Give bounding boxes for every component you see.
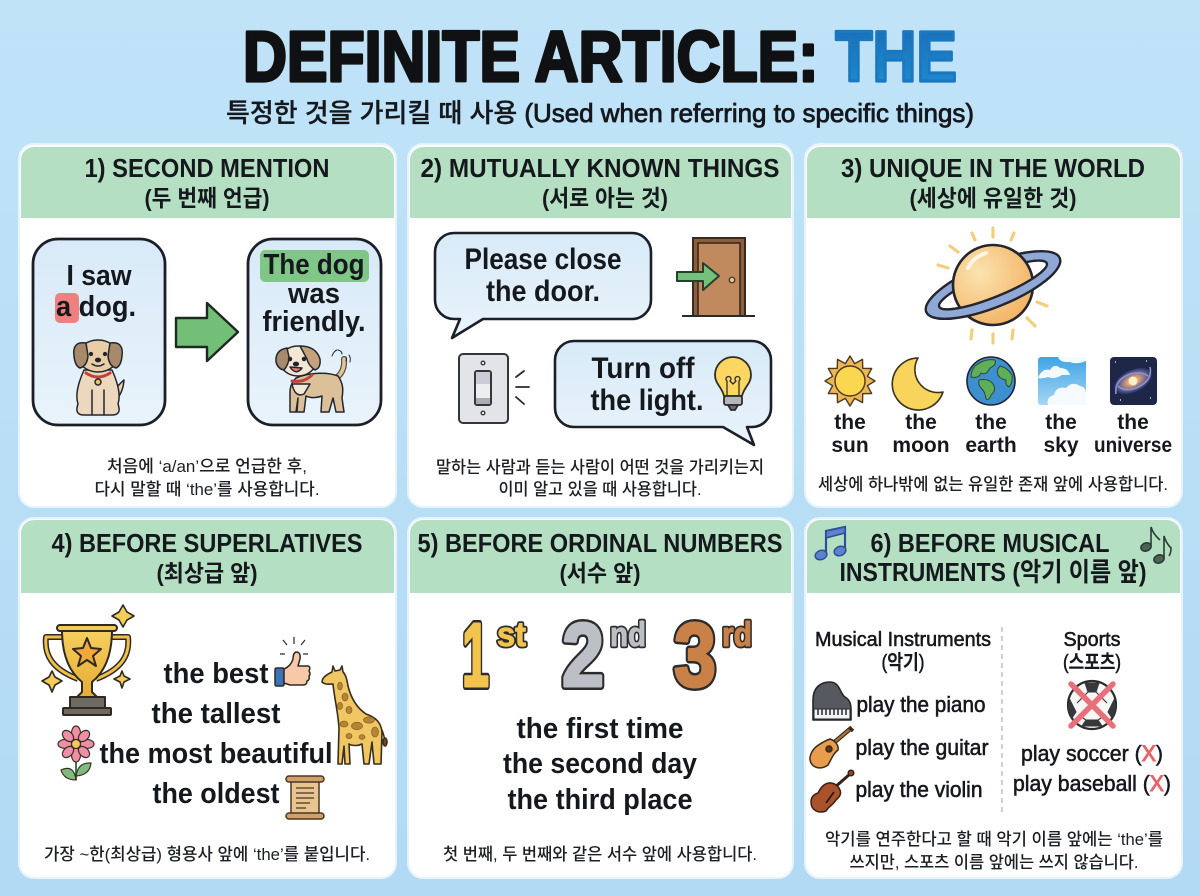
icon: galaxy — [1110, 357, 1157, 405]
panel heading: before musical instruments: INSTRUMENTS (악기 이름 앞) — [840, 557, 1146, 587]
superlative phrases: the best — [164, 658, 269, 690]
ordinal: 2nd: 2 — [562, 606, 604, 706]
label: the earth — [965, 411, 1017, 457]
ordinal phrases: the second day — [503, 748, 697, 780]
caption: before superlatives: 가장 ~한(최상급) 형용사 앞에 ‘the’를 붙입니다. — [44, 845, 370, 864]
icon: guitar — [810, 727, 853, 768]
ordinal phrases — [503, 713, 697, 816]
arrow: second mention — [176, 303, 238, 361]
card: the dog was friendly — [248, 239, 381, 425]
title: DEFINITE ARTICLE: THE — [243, 18, 957, 97]
ordinal: 3rd — [674, 606, 752, 706]
icon: flower — [58, 726, 94, 780]
icon: light bulb — [715, 357, 751, 410]
icon: eighth notes — [1140, 527, 1171, 565]
column: sports — [1013, 629, 1171, 796]
label: the sun: sun — [831, 434, 869, 457]
caption: before musical instruments — [825, 830, 1163, 872]
ordinal: 1st: st — [497, 616, 526, 654]
icon: standing dog — [276, 346, 350, 412]
caption: second mention: 다시 말할 때 ‘the’를 사용합니다. — [94, 480, 320, 499]
ordinal phrases: the first time — [516, 713, 684, 745]
icon: light switch — [459, 354, 529, 423]
panel heading: before superlatives: (최상급 앞) — [156, 560, 258, 586]
icon: moon — [892, 358, 943, 410]
label: the moon: moon — [892, 434, 950, 457]
ordinal: 2nd: 2 — [562, 606, 604, 706]
caption: mutually known things: 이미 알고 있을 때 사용합니다. — [498, 480, 702, 499]
label: the sky — [1043, 411, 1079, 457]
panel heading: unique in the world — [807, 147, 1180, 218]
card: the dog was friendly: The dog — [264, 249, 364, 281]
panel: before musical instruments — [805, 518, 1182, 878]
panel heading: before musical instruments — [807, 520, 1180, 593]
column: sports: (스포츠) — [1063, 652, 1121, 674]
speech bubble: please close the door: Please close — [464, 243, 622, 276]
card: the dog was friendly: was — [287, 278, 340, 310]
phrase: play the violin: play the violin — [856, 777, 982, 802]
label: the earth: the — [975, 411, 1007, 434]
panel: mutually known things — [408, 144, 793, 507]
caption: mutually known things — [436, 458, 764, 499]
panel: before ordinal numbers — [408, 518, 793, 878]
icon: scroll — [286, 776, 324, 819]
column: musical instruments — [810, 629, 991, 812]
ordinal: 2nd — [562, 606, 646, 706]
ordinal: 1st: st — [497, 616, 526, 654]
caption: before musical instruments: 쓰지만, 스포츠 이름 앞에는 쓰지 않습니다. — [850, 853, 1138, 872]
card: the dog was friendly: friendly. — [262, 306, 366, 338]
panel heading: mutually known things — [410, 147, 791, 218]
label: the sky: the — [1045, 411, 1077, 434]
speech bubble: please close the door: the door. — [486, 275, 600, 308]
ordinal: 2nd: nd — [610, 616, 646, 654]
speech bubble: please close the door — [435, 233, 651, 338]
superlative phrases: the tallest — [152, 698, 281, 730]
ordinal: 3rd: 3 — [674, 606, 716, 706]
column: musical instruments: (악기) — [882, 651, 924, 674]
icon: trophy with sparkles — [42, 605, 134, 715]
panel heading: before ordinal numbers — [410, 520, 791, 593]
panel heading: unique in the world: 3) UNIQUE IN THE WORLD — [841, 153, 1145, 183]
label: the sky: sky — [1043, 434, 1079, 457]
icon: beamed notes — [814, 527, 847, 561]
ordinal: 2nd: nd — [610, 616, 646, 654]
subtitle: 특정한 것을 가리킬 때 사용 (Used when referring to specific things) — [226, 98, 974, 128]
panel heading: unique in the world: (세상에 유일한 것) — [910, 185, 1076, 211]
speech bubble: turn off the light: Turn off — [592, 352, 695, 385]
label: the sun: the — [834, 411, 866, 434]
column: sports: Sports — [1064, 629, 1120, 651]
ordinal: 1st: 1 — [462, 606, 489, 706]
icon: sky — [1038, 357, 1086, 405]
panel: second mention — [19, 144, 396, 507]
caption: second mention: 처음에 ‘a/an’으로 언급한 후, — [107, 457, 307, 476]
phrase: play baseball (X): play baseball (X) — [1013, 771, 1171, 796]
caption: mutually known things: 말하는 사람과 듣는 사람이 어떤 것을 가리키는지 — [436, 458, 764, 477]
panel heading: before superlatives: 4) BEFORE SUPERLATIVES — [52, 528, 362, 558]
icon: sun — [825, 356, 875, 406]
caption: second mention — [94, 457, 320, 499]
speech bubble: turn off the light: the light. — [590, 384, 704, 417]
icon: thumbs up — [275, 637, 310, 686]
phrase: play the guitar: play the guitar — [856, 735, 988, 760]
panel heading: second mention: 1) SECOND MENTION — [84, 153, 330, 183]
caption: unique in the world: 세상에 하나밖에 없는 유일한 존재 앞에 사용합니다. — [818, 475, 1168, 494]
icon: piano — [813, 682, 851, 720]
panel heading: mutually known things: 2) MUTUALLY KNOWN THINGS — [420, 153, 780, 183]
ordinal: 3rd: rd — [722, 616, 752, 654]
ordinal: 3rd: rd — [722, 616, 752, 654]
ordinal: 3rd: 3 — [674, 606, 716, 706]
label: the universe: universe — [1094, 434, 1172, 457]
superlative phrases — [100, 658, 332, 810]
ordinal phrases: the third place — [508, 784, 692, 816]
icon: earth — [967, 357, 1015, 405]
speech bubble: turn off the light — [555, 341, 771, 445]
panel heading: second mention — [21, 147, 394, 218]
panel heading: before ordinal numbers: (서수 앞) — [560, 560, 640, 586]
phrase: play the piano: play the piano — [856, 692, 986, 717]
panel heading: before superlatives — [21, 520, 394, 593]
card: I saw a dog — [33, 239, 165, 425]
panel heading: mutually known things: (서로 아는 것) — [542, 185, 668, 211]
panel heading: before musical instruments: 6) BEFORE MUSICAL — [870, 528, 1110, 558]
panel: before superlatives — [19, 518, 396, 878]
card: I saw a dog: a dog. — [56, 291, 136, 323]
label: the moon: the — [905, 411, 937, 434]
panel: unique in the world — [805, 144, 1182, 507]
caption: before musical instruments: 악기를 연주한다고 할 때 악기 이름 앞에는 ‘the’를 — [825, 830, 1163, 849]
superlative phrases: the most beautiful — [100, 738, 332, 770]
icon: crossed-out soccer ball — [1068, 681, 1116, 729]
label: the universe — [1094, 411, 1172, 457]
card: I saw a dog: I saw — [66, 260, 132, 292]
column: musical instruments: Musical Instruments — [815, 629, 991, 651]
ordinal: 1st: 1 — [462, 606, 489, 706]
superlative phrases: the oldest — [152, 778, 280, 810]
label: the moon — [892, 411, 950, 457]
icon: violin — [811, 770, 854, 812]
label: the sun — [831, 411, 869, 457]
label: the earth: earth — [965, 434, 1017, 457]
phrase: play soccer (X): play soccer (X) — [1021, 741, 1163, 766]
icon: sitting dog — [74, 340, 124, 415]
icon: door with arrow — [677, 238, 755, 316]
icon: ringed planet with rays — [924, 226, 1062, 345]
icon: giraffe — [322, 666, 387, 764]
caption: before ordinal numbers: 첫 번째, 두 번째와 같은 서수 앞에 사용합니다. — [443, 845, 757, 864]
label: the universe: the — [1117, 411, 1149, 434]
panel heading: before ordinal numbers: 5) BEFORE ORDINAL NUMBERS — [418, 528, 782, 558]
panel heading: second mention: (두 번째 언급) — [144, 185, 270, 211]
